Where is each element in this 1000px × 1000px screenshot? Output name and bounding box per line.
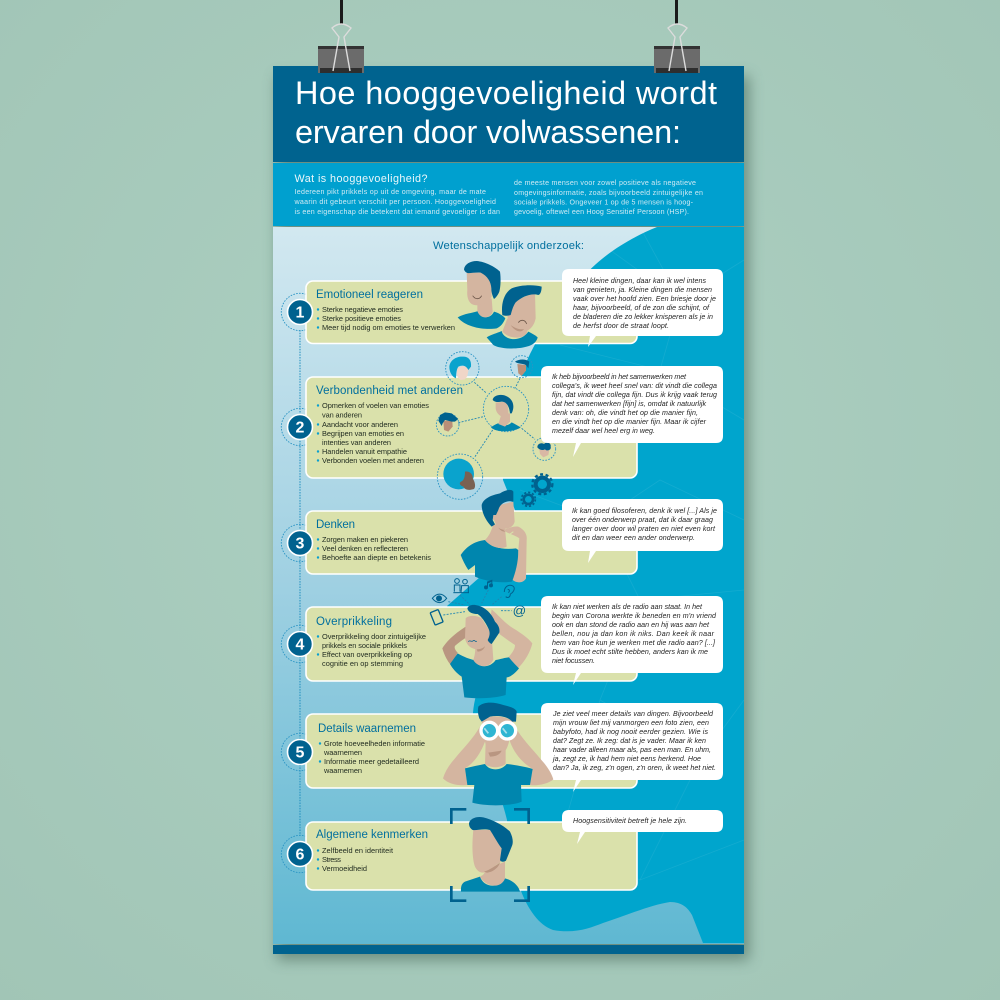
speech bubble 2: en die vindt het op die manier fijn. Maar ik cijfer	[552, 418, 707, 426]
speech bubble 6: Hoogsensitiviteit betreft je hele zijn.	[573, 817, 687, 825]
binder clip right	[654, 0, 700, 73]
row 6 card: Algemene kenmerken	[306, 822, 637, 890]
number badge 6: 6	[296, 846, 305, 864]
arm and hand	[503, 527, 527, 582]
speech bubble 5: ja, zegt ze, ik had hem niet eens herkend. Hoe	[552, 755, 701, 763]
speech bubble 1: de bladeren die zo lekker knisperen als je in	[573, 313, 713, 321]
hair	[478, 703, 517, 722]
intro column right: omgevingsinformatie, zoals bijvoorbeeld zintuigelijke en	[514, 189, 703, 197]
icon: eye	[432, 594, 447, 603]
number badge 3	[288, 530, 312, 556]
right man	[487, 285, 542, 348]
intro column left	[294, 188, 500, 216]
figure 3: thinking person	[461, 490, 527, 582]
intro band	[273, 163, 744, 226]
hair	[482, 490, 513, 527]
bullets: cognitie en op stemming	[322, 659, 403, 668]
row 5 card: Details waarnemen	[306, 714, 637, 788]
speech bubble 6	[562, 810, 723, 844]
poster	[273, 66, 744, 954]
icon: small gear	[521, 492, 535, 506]
number badge 2	[288, 414, 312, 440]
heading: Algemene kenmerken	[316, 829, 428, 841]
bullets: van anderen	[322, 410, 362, 420]
face	[465, 616, 490, 649]
viewfinder corners	[451, 809, 529, 901]
speech bubble 5: dan? Ja, ik zeg, z'n ogen, z'n oren, ik weet het niet.	[553, 764, 716, 772]
speech bubble 2: mezelf daar wel heel erg in weg.	[552, 427, 655, 435]
connection lines	[458, 378, 535, 457]
number badge 3: 3	[296, 536, 305, 552]
bullets: Informatie meer gedetailleerd	[324, 757, 419, 766]
network: right person	[533, 438, 556, 460]
speech bubble 4	[541, 596, 723, 685]
blue wave background	[447, 227, 744, 943]
speech bubble 5	[541, 703, 723, 792]
bullets	[317, 401, 429, 465]
header band	[273, 66, 744, 162]
speech bubble 1: van genieten, ja. Kleine dingen die mensen	[573, 286, 712, 294]
figure 4: overstimulated person	[442, 605, 532, 698]
bullets: Stress	[322, 855, 341, 864]
speech bubble 1	[562, 269, 723, 347]
footer band	[273, 945, 744, 954]
icon: music note	[484, 580, 493, 589]
speech bubble 1: Heel kleine dingen, daar kan ik wel intens	[573, 277, 706, 285]
bullets: intenties van anderen	[322, 438, 391, 447]
arms	[443, 727, 487, 785]
speech bubble 3: dit en dan weer een ander onderwerp.	[572, 534, 695, 542]
shirt	[465, 764, 533, 805]
number badge 4: 4	[296, 636, 305, 654]
speech bubble 1: de herfst door de straat loopt.	[573, 322, 669, 330]
heading: Emotioneel reageren	[316, 289, 423, 301]
speech bubble 5: dat? Zegt ze. Ik zeg: dat is je vader. Maar ik ken	[553, 737, 706, 745]
speech bubble 4: bellen, nou ja dan kon ik niks. Dan keek ik naar	[552, 630, 715, 638]
row 4 card: Overprikkeling	[306, 607, 637, 681]
speech bubble 2: dat het samenwerken [fijn] is, omdat ik natuurlijk	[552, 400, 706, 408]
figure 5: person with binoculars	[443, 703, 553, 805]
neck	[485, 523, 507, 548]
face	[493, 502, 515, 529]
timeline line and dashed rings	[281, 293, 319, 873]
intro column left: Iedereen pikt prikkels op uit de omgeving, maar de mate	[294, 188, 486, 196]
title: ervaren door volwassenen:	[295, 114, 681, 150]
overprikkeling icons	[430, 579, 526, 625]
speech bubble 4: Dus ik moet echt stilte hebben, anders kan ik me	[552, 648, 708, 656]
row 1 card: Emotioneel reageren	[306, 281, 637, 344]
icon: large gear	[532, 474, 552, 494]
dotted links	[443, 590, 512, 615]
number badge 1: 1	[296, 304, 305, 322]
figure 6: portrait in viewfinder	[451, 809, 529, 901]
number badge 6	[288, 842, 312, 866]
intro column right: de meeste mensen voor zowel positieve als negatieve	[514, 179, 696, 187]
bullets	[317, 846, 393, 873]
bullets: prikkels en sociale prikkels	[322, 641, 407, 650]
intro heading: Wat is hooggevoeligheid?	[294, 173, 428, 185]
speech bubble 1: haar, bijvoorbeeld, of de zon die schijnt, of	[573, 304, 710, 312]
number badge 1	[288, 300, 312, 324]
speech bubble 2	[541, 366, 723, 457]
title: Hoe hooggevoeligheid wordt	[295, 75, 717, 111]
network: left person	[436, 412, 459, 436]
bullets: Opmerken of voelen van emoties	[322, 401, 429, 410]
speech bubble 2: fijn, dat vindt die collega fijn. Dus ik krijg vaak terug	[552, 391, 717, 399]
speech bubble 4: Ik kan niet werken als de radio aan staat. In het	[552, 603, 703, 611]
speech bubble 4: niet focussen.	[552, 657, 595, 665]
speech bubble 4: ook en dan stond de radio aan en hij was aan het	[552, 621, 710, 629]
network diagram	[436, 352, 556, 506]
network: top-right person	[511, 356, 533, 378]
row 2 card: Verbondenheid met anderen	[306, 377, 637, 478]
intro column left: is een eigenschap die betekent dat iemand gevoeliger is dan	[294, 208, 500, 216]
icon: phone	[430, 610, 443, 625]
intro column right: sociale prikkels. Ongeveer 1 op de 5 mensen is hoog-	[514, 198, 694, 206]
speech bubble 4: hem van hoe kun je werken met die radio aan? [...]	[552, 639, 716, 647]
bullets: Meer tijd nodig om emoties te verwerken	[322, 323, 455, 332]
section heading: Wetenschappelijk onderzoek:	[433, 240, 584, 252]
heading: Verbondenheid met anderen	[316, 385, 463, 397]
speech bubble 5: Je ziet veel meer details van dingen. Bijvoorbeeld	[552, 710, 714, 718]
speech bubble 5: haar vader alleen maar als, pas een man. En uhm,	[553, 746, 711, 754]
bullets: Zelfbeeld en identiteit	[322, 846, 393, 855]
title	[295, 75, 717, 150]
network: bottom person from behind	[437, 454, 483, 499]
heading: Denken	[316, 519, 355, 531]
row 3 card: Denken	[306, 511, 637, 574]
arms	[442, 625, 468, 665]
bullets: waarnemen	[323, 766, 362, 775]
bullets: Vermoeidheid	[322, 864, 367, 873]
left man	[458, 261, 505, 329]
poster shadow	[277, 76, 749, 960]
bullets: Zorgen maken en piekeren	[322, 535, 408, 544]
speech bubble 3: Ik kan goed filosoferen, denk ik wel [...] Als je	[572, 507, 717, 515]
speech bubble 2: collega's, ik weet heel snel van: dit vindt die collega	[552, 382, 717, 390]
bullets: Handelen vanuit empathie	[322, 447, 407, 456]
intro column right: gevoelig, oftewel een Hoog Sensitief Persoon (HSP).	[514, 208, 689, 216]
icon: ear	[504, 585, 514, 597]
bullets: Behoefte aan diepte en betekenis	[322, 553, 431, 562]
intro column right	[514, 179, 703, 216]
shirt	[461, 540, 518, 582]
shirt	[450, 653, 519, 698]
heading: Overprikkeling	[316, 616, 392, 628]
bullets: waarnemen	[323, 748, 362, 757]
speech bubble 3: langer over door wil praten en niet even kort	[572, 525, 716, 533]
number badge 2: 2	[296, 420, 305, 436]
number badge 5: 5	[296, 744, 305, 762]
bullets: Verbonden voelen met anderen	[322, 456, 424, 465]
speech bubble 4: begin van Corona werkte ik beneden en m'n vriend	[552, 612, 717, 620]
speech bubble 5: babyfoto, had ik nog nooit eerder gezien. Wie is	[553, 728, 708, 736]
bullets: Begrijpen van emoties en	[322, 429, 404, 438]
icon: at sign: @	[513, 603, 526, 618]
bullets: Grote hoeveelheden informatie	[324, 739, 425, 748]
bullets	[317, 535, 431, 562]
network: central person	[483, 386, 529, 432]
bullets	[317, 632, 426, 668]
number badge 5	[288, 740, 312, 764]
neck	[473, 637, 493, 666]
number badge 4	[288, 632, 312, 656]
heading: Details waarnemen	[318, 723, 416, 735]
bullets: Sterke positieve emoties	[322, 314, 401, 323]
figure 1: two faces	[458, 261, 542, 348]
bullets	[317, 305, 455, 332]
speech bubble 3	[562, 499, 723, 563]
bullets: Effect van overprikkeling op	[322, 650, 412, 659]
speech bubble 3: over één onderwerp praat, dat ik daar graag	[572, 516, 713, 524]
binder clip left	[318, 0, 364, 73]
poster body background	[273, 227, 744, 944]
neck and face	[485, 742, 506, 767]
bullets: Veel denken en reflecteren	[322, 544, 408, 553]
bullets: Aandacht voor anderen	[322, 420, 398, 429]
hair	[467, 605, 499, 644]
speech bubble 2: Ik heb bijvoorbeeld in het samenwerken met	[552, 373, 687, 381]
icon: people	[453, 579, 469, 593]
speech bubble 1: vaak over het hoofd zien. Een briesje door je	[573, 295, 716, 303]
bullets: Sterke negatieve emoties	[322, 305, 403, 314]
speech bubble 5: mijn vrouw liet mij vanmorgen een foto zien, een	[553, 719, 709, 727]
speech bubble 2: denk van: oh, die vindt het op die manier fijn,	[552, 409, 698, 417]
intro text: Wat is hooggevoeligheid	[294, 173, 703, 216]
binoculars	[481, 722, 516, 739]
network: top-left person	[446, 352, 479, 385]
bullets: Overprikkeling door zintuigelijke	[322, 632, 426, 641]
bullets	[319, 739, 425, 775]
intro column left: waarin dit gebeurt verschilt per persoon. Hooggevoeligheid	[294, 198, 496, 206]
